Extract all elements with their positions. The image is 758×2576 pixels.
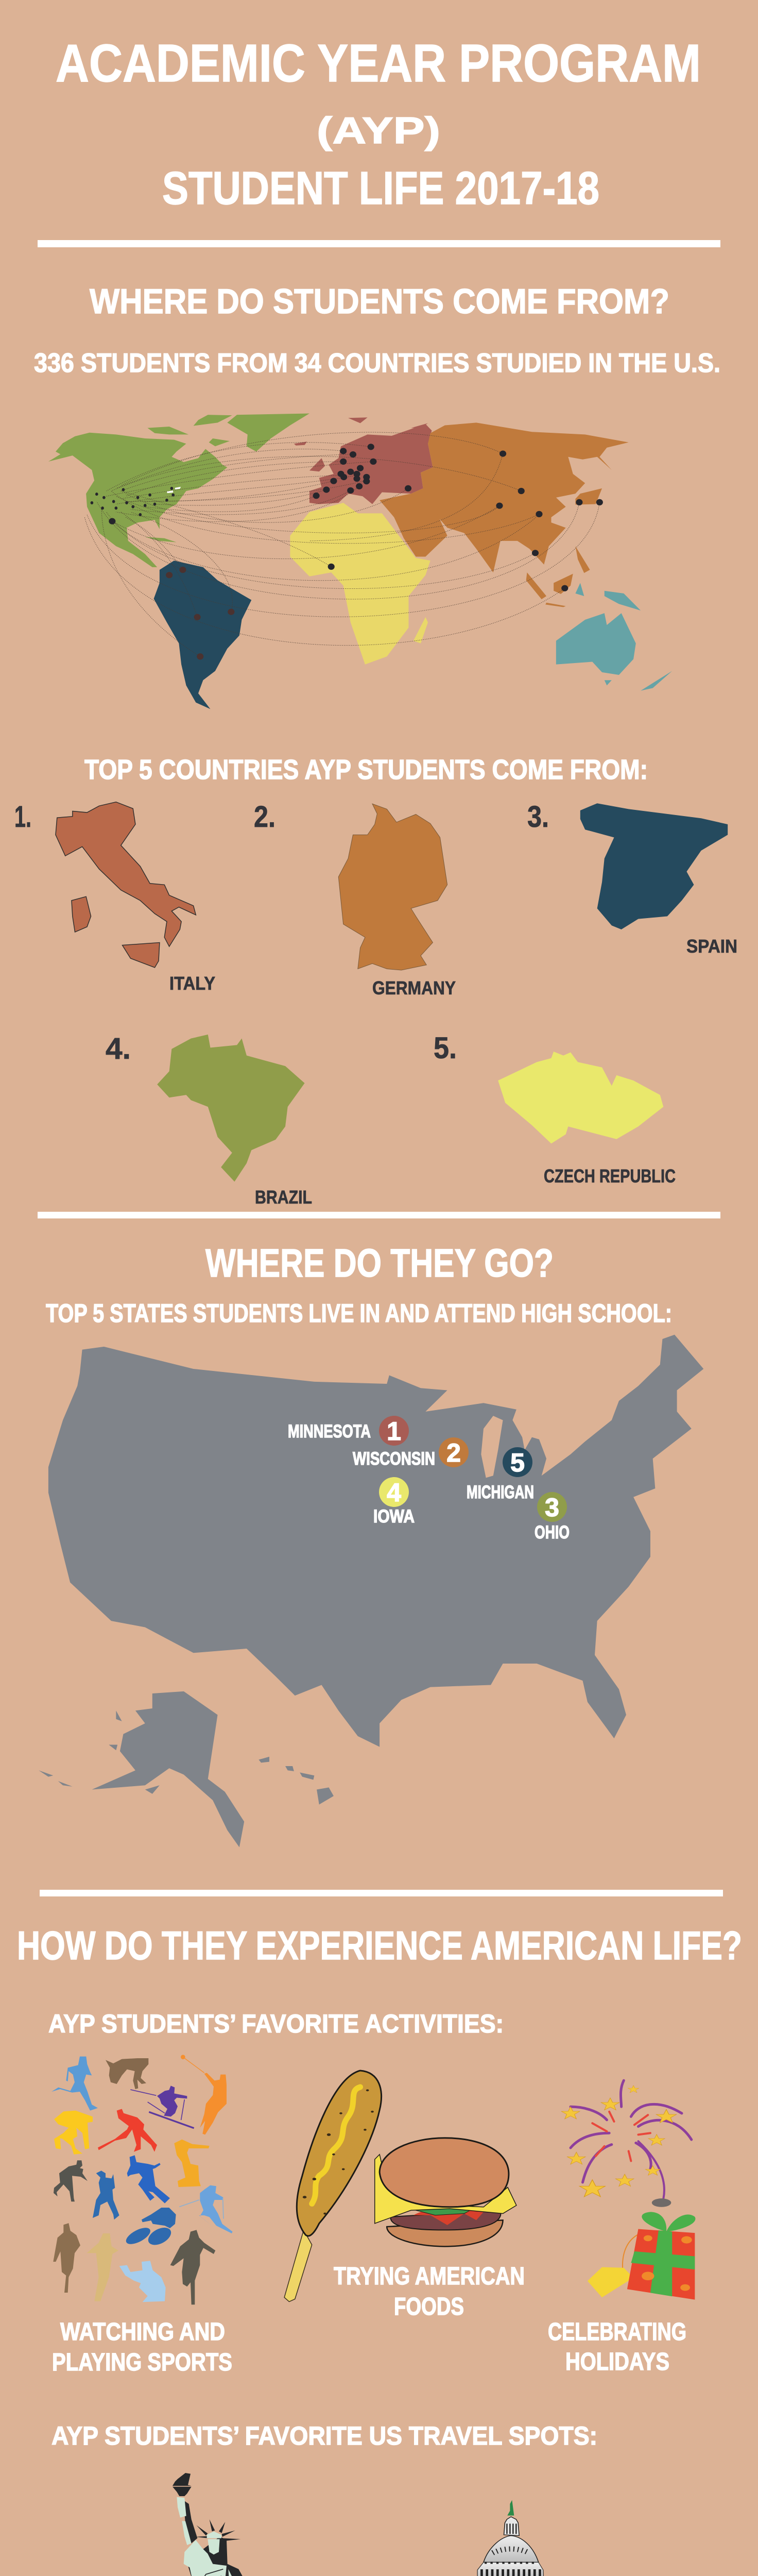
oceania [556,583,672,691]
marker: ohio: OHIO [535,1522,570,1543]
crown spikes [196,2519,240,2541]
batter blue [93,2171,119,2219]
country: germany [254,800,456,998]
robe [184,2531,257,2576]
marker: iowa: 4 [387,1478,401,1507]
country: italy [14,800,215,994]
label: foods: FOODS [394,2293,464,2320]
south america [154,561,251,709]
marker: iowa: IOWA [373,1506,415,1527]
label: sports: PLAYING SPORTS [52,2349,232,2376]
marker: ohio [535,1492,570,1543]
icon: hamburger [375,2138,516,2246]
country: germany: 2. [254,800,275,834]
hawaii [259,1757,334,1805]
north america [48,414,309,567]
marker: wisconsin [353,1437,469,1469]
marker: wisconsin: WISCONSIN [353,1449,435,1469]
subheading: top 5 countries: TOP 5 COUNTRIES AYP STUDENTS COME FROM: [84,754,648,785]
subheading: favorite travel spots: AYP STUDENTS’ FAVORITE US TRAVEL SPOTS: [51,2421,597,2450]
runner light blue [51,2057,98,2111]
label: foods [334,2263,525,2320]
icon: corn dog [284,2071,382,2302]
world map [48,414,672,709]
label: sports [52,2318,232,2376]
marker: minnesota [288,1416,409,1446]
country: germany: GERMANY [372,977,456,998]
label: foods: TRYING AMERICAN [334,2263,525,2290]
icon: fireworks [561,2080,692,2207]
dome [471,2500,549,2576]
label: holidays: HOLIDAYS [565,2348,669,2376]
pitcher grey [54,2160,88,2201]
country: brazil [106,1032,312,1208]
alaska [39,1691,244,1847]
us map [39,1335,703,1847]
field hockey red [98,2109,157,2152]
country: spain: 3. [527,800,549,834]
runner brown [53,2223,80,2293]
country: brazil: BRAZIL [255,1187,312,1208]
torch [173,2473,192,2496]
marker: michigan: 5 [510,1448,525,1477]
high jumper brown [106,2058,148,2089]
cricket amber [174,2140,210,2187]
icon: statue of liberty [173,2473,260,2576]
country: czech republic: CZECH REPUBLIC [544,1165,676,1187]
country: brazil: 4. [106,1032,131,1065]
icon: us capitol [358,2500,664,2576]
title: STUDENT LIFE 2017-18 [162,163,599,214]
runner tan [87,2233,118,2301]
catcher pale blue [119,2261,166,2302]
country: czech republic: 5. [434,1031,457,1065]
label: sports: WATCHING AND [60,2318,225,2346]
cyclist steel blue [124,2208,176,2248]
marker: ohio: 3 [545,1493,559,1522]
hockey player blue [127,2155,170,2204]
subheading: favorite activities: AYP STUDENTS’ FAVORITE ACTIVITIES: [48,2009,504,2038]
heading: where do students come from: WHERE DO STUDENTS COME FROM? [90,282,669,321]
runner dark [170,2230,215,2304]
label: holidays [548,2318,686,2376]
country: italy: ITALY [169,973,215,994]
europe [294,417,433,504]
country: spain [527,800,737,957]
skier purple [130,2086,194,2128]
marker: minnesota: MINNESOTA [288,1421,371,1442]
marker: wisconsin: 2 [446,1438,461,1467]
location dots [91,444,603,659]
marker: minnesota: 1 [387,1417,401,1446]
title [56,33,701,214]
africa [290,503,430,665]
country: czech republic [434,1031,676,1187]
country: italy: 1. [14,800,31,834]
contiguous states [48,1335,703,1747]
label: holidays: CELEBRATING [548,2318,686,2346]
title: (AYP) [317,110,440,151]
sprinter yellow [54,2111,93,2155]
marker: michigan: MICHIGAN [467,1482,534,1502]
icon: sports silhouettes [51,2055,233,2304]
hammer thrower orange [181,2055,227,2134]
heading: where do they go: WHERE DO THEY GO? [205,1241,554,1285]
cross country skier light blue [179,2185,233,2233]
raised arm [177,2497,197,2545]
marker: iowa [373,1477,415,1527]
icon: gift box [588,2212,695,2300]
asia [380,422,629,607]
country: spain: SPAIN [686,936,737,957]
connection arcs [84,432,599,656]
marker: michigan [467,1447,534,1502]
